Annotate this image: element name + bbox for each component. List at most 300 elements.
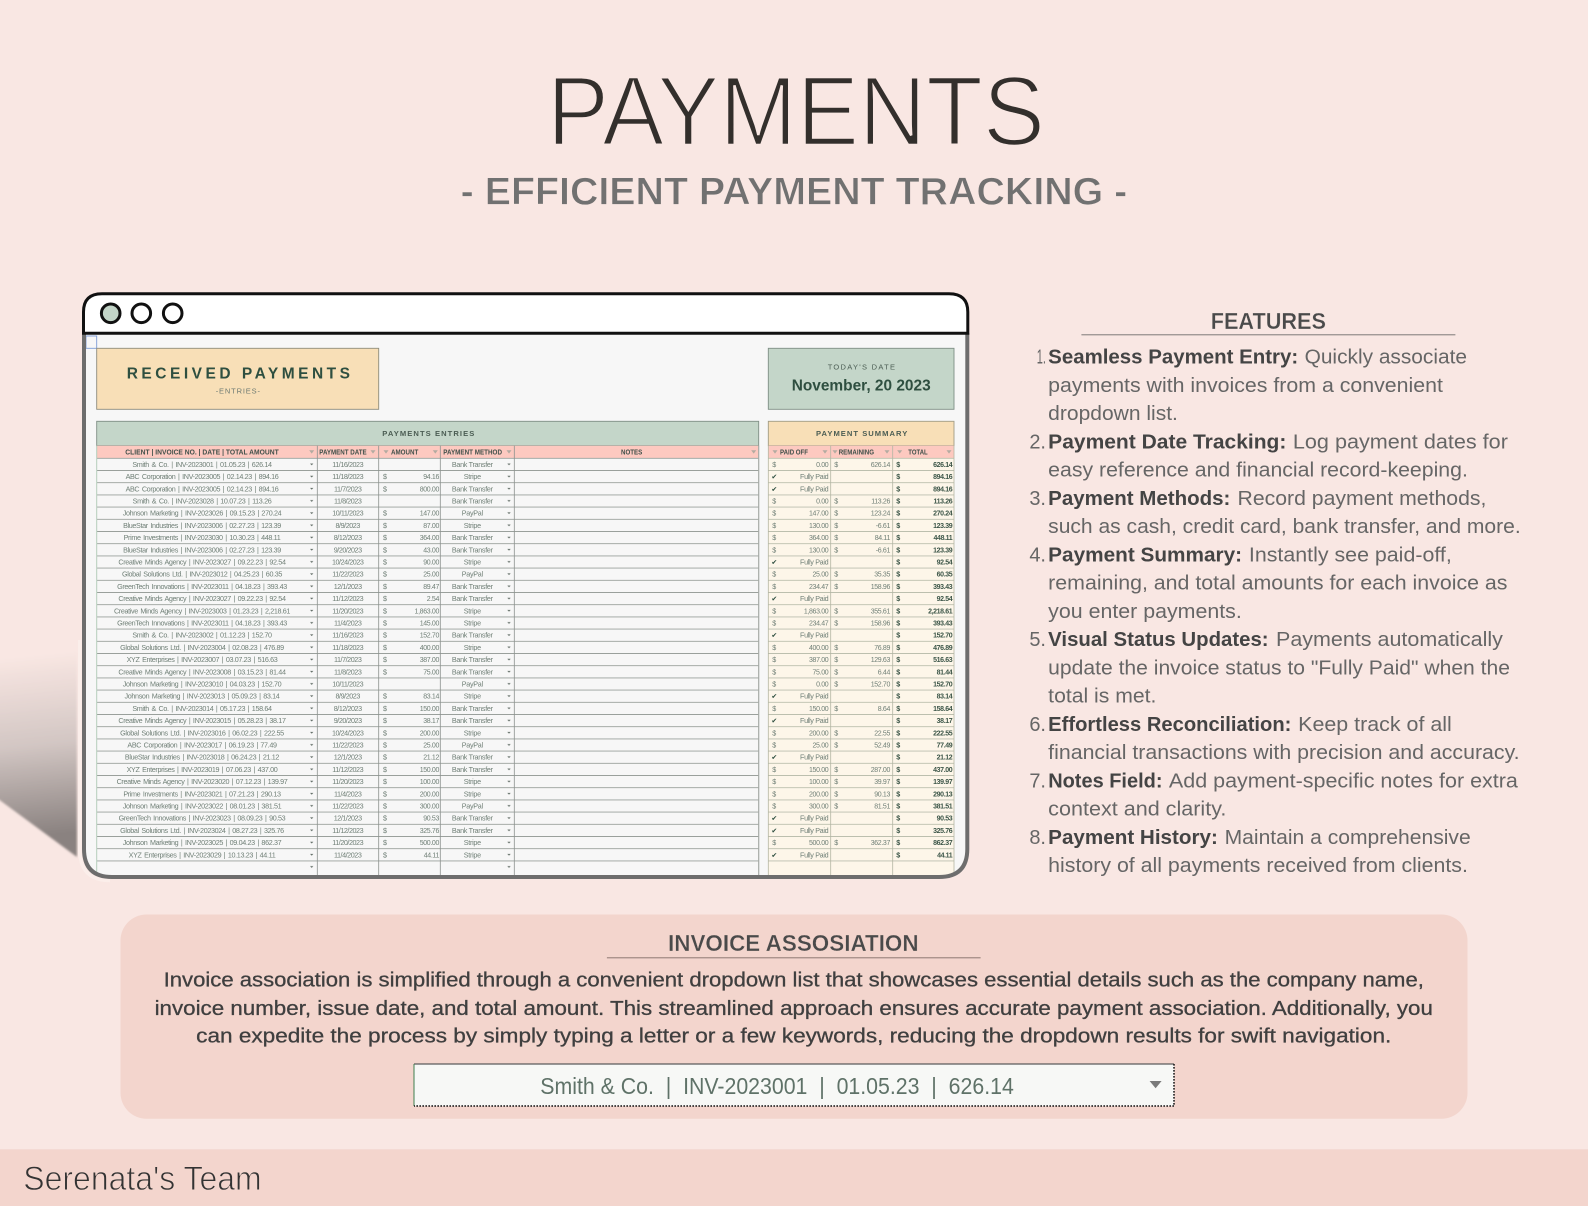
row 11: Bank Transfer [452, 582, 494, 591]
row 22: 9/20/2023 [334, 716, 362, 725]
window title bar [84, 294, 968, 333]
row 4: 11/8/2023 [334, 496, 362, 506]
row 29: $ [834, 802, 838, 810]
row 6: 87.00 [423, 523, 439, 530]
feature 5: Visual Status Updates: [1048, 629, 1269, 651]
dropdown example cell: Smith & Co. | INV-2023001 | 01.05.23 | 626.14 [540, 1073, 1014, 1099]
row 33: 44.11 [424, 852, 439, 859]
row 6: -6.61 [876, 523, 890, 530]
row 2: $ [383, 472, 387, 481]
row 31: Bank Transfer [452, 826, 494, 835]
row 5: 270.24 [933, 511, 953, 518]
row 9 [118, 559, 953, 566]
row 33: ✔ [771, 851, 777, 859]
row 13 [114, 608, 952, 615]
row 23: 10/24/2023 [332, 728, 364, 737]
window control: white dot [132, 304, 151, 323]
row 28: 200.00 [809, 791, 829, 798]
row 14: 11/4/2023 [334, 618, 362, 628]
table header row: NOTES [621, 447, 642, 456]
row 27: $ [772, 777, 776, 786]
row 30: 90.53 [937, 816, 953, 823]
feature 3: 3. [1029, 488, 1046, 510]
feature 4: 4. [1029, 544, 1046, 566]
row 17: $ [383, 655, 387, 664]
table header row: PAYMENT DATE [319, 447, 367, 456]
row 4: 113.26 [871, 498, 890, 506]
row 5: 123.24 [871, 511, 890, 518]
row 29 [123, 802, 953, 810]
row 18: 75.00 [423, 669, 439, 676]
row 13: $ [383, 606, 387, 615]
row 29: 300.00 [420, 804, 439, 810]
row 19: $ [772, 680, 776, 688]
row 2 [126, 474, 952, 480]
row 26: $ [383, 765, 387, 774]
row 21: 150.00 [809, 706, 829, 713]
feature 6 [1029, 714, 1520, 764]
row 3: Fully Paid [800, 484, 829, 493]
row 9: Creative Minds Agency | INV-2023027 | 09.22.23 | 92.54 [118, 558, 286, 566]
row 7 [124, 534, 952, 542]
row 30: Fully Paid [800, 814, 829, 823]
row 21: $ [383, 704, 387, 713]
row 20: $ [896, 692, 900, 701]
row 15: 11/16/2023 [332, 631, 364, 640]
row 23: Stripe [464, 728, 481, 737]
row 18 [118, 669, 953, 676]
row 16: 11/18/2023 [332, 643, 364, 652]
row 26: $ [834, 765, 838, 774]
row 12: $ [383, 594, 387, 603]
row 17: Bank Transfer [452, 655, 494, 664]
row 11: 158.96 [871, 584, 890, 591]
row 12: Bank Transfer [452, 594, 494, 603]
row 12: 11/12/2023 [332, 594, 364, 603]
row 17: $ [772, 655, 776, 664]
row 12: Fully Paid [800, 594, 829, 603]
row 8: 130.00 [809, 547, 829, 554]
row 26: 11/12/2023 [332, 765, 364, 774]
row 20: Fully Paid [800, 692, 829, 701]
row 25: 12/1/2023 [334, 753, 362, 762]
row 24: 52.49 [874, 742, 890, 750]
row 25: 21.12 [423, 755, 439, 762]
row 21: 158.64 [933, 706, 953, 713]
row 5: 147.00 [420, 511, 439, 518]
row 8: $ [834, 545, 838, 554]
row 32: Stripe [464, 838, 481, 847]
feature 1 [1037, 346, 1467, 425]
heading: invoice association: INVOICE ASSOSIATION [668, 930, 919, 956]
invoice description text: Invoice association is simplified through a convenient dropdown list that showcases essential details such as the company name, [164, 970, 1424, 992]
row 25: ✔ [771, 754, 777, 762]
window frame lower border [84, 333, 967, 877]
row 29: PayPal [462, 802, 483, 810]
band: payments entries [97, 421, 759, 446]
row 15: 152.70 [420, 633, 439, 640]
row 29: $ [772, 802, 776, 810]
row 29: 81.51 [874, 804, 890, 810]
row 28: $ [834, 789, 838, 798]
row 3: 894.16 [933, 486, 953, 493]
row 24: $ [383, 740, 387, 750]
row 17: 387.00 [420, 657, 439, 664]
row 1: $ [896, 460, 900, 469]
row 28 [123, 789, 953, 798]
row 10: PayPal [462, 570, 483, 579]
row 15: 152.70 [933, 633, 953, 640]
row 7: 84.11 [875, 535, 890, 542]
feature 1: Quickly associate [1305, 346, 1467, 368]
band: payment summary [768, 421, 954, 446]
feature 6: Keep track of all [1298, 714, 1452, 736]
row 16: $ [896, 643, 900, 652]
row 10: 11/22/2023 [332, 570, 364, 579]
row 33: XYZ Enterprises | INV-2023029 | 10.13.23 | 44.11 [129, 850, 276, 859]
row 13: $ [772, 606, 776, 615]
row 15 [132, 632, 952, 639]
row 31 [120, 826, 953, 835]
row 20: $ [383, 692, 387, 701]
row 7: $ [896, 533, 900, 542]
table header row: CLIENT | INVOICE NO. | DATE | TOTAL AMOUNT [125, 447, 279, 456]
footer brand name: Serenata's Team [23, 1160, 262, 1198]
row 28: $ [896, 789, 900, 798]
row 5: PayPal [462, 509, 483, 518]
row 2: 94.16 [423, 474, 439, 481]
row 31: 11/12/2023 [332, 826, 364, 835]
row 6: 123.39 [933, 523, 953, 530]
window body [84, 333, 967, 877]
row 9: Stripe [464, 558, 481, 566]
row 24: PayPal [462, 740, 483, 750]
row 14: $ [772, 618, 776, 628]
row 29: 300.00 [809, 804, 829, 810]
row 26 [126, 766, 952, 774]
feature 7: 7. [1029, 770, 1046, 792]
row 11: 89.47 [423, 584, 439, 591]
row 30: $ [383, 814, 387, 823]
row 23: Global Solutions Ltd. | INV-2023016 | 06.02.23 | 222.55 [120, 728, 284, 737]
row 15: Smith & Co. | INV-2023002 | 01.12.23 | 152.70 [132, 631, 272, 640]
row 7: Prime Investments | INV-2023030 | 10.30.23 | 448.11 [124, 533, 281, 542]
feature 2: easy reference and financial record-keeping. [1048, 460, 1468, 482]
row 15: ✔ [771, 632, 777, 640]
row 5: $ [383, 509, 387, 518]
row 11: $ [383, 582, 387, 591]
row 22: $ [383, 716, 387, 725]
card: received payments: -ENTRIES- [216, 387, 260, 396]
row 23: 222.55 [933, 730, 953, 737]
row 25: $ [383, 753, 387, 762]
dropdown example cell [414, 1064, 1174, 1106]
feature 4: Payment Summary: [1048, 544, 1242, 566]
row 10: 35.35 [874, 572, 890, 579]
row 8: -6.61 [876, 547, 890, 554]
table header row: REMAINING [839, 447, 874, 456]
row 18: Creative Minds Agency | INV-2023008 | 03.15.23 | 81.44 [118, 667, 286, 676]
band: payment summary: PAYMENT SUMMARY [816, 429, 907, 438]
row 5: Johnson Marketing | INV-2023026 | 09.15.23 | 270.24 [123, 509, 282, 518]
row 16: Stripe [464, 643, 481, 652]
feature 5: Payments automatically [1276, 629, 1503, 651]
row 6: $ [834, 521, 838, 530]
row 26: 150.00 [809, 767, 829, 774]
row 24: $ [896, 740, 900, 750]
row 1: 0.00 [816, 462, 829, 469]
row 4: 0.00 [816, 498, 829, 506]
row 10: $ [383, 570, 387, 579]
feature 3 [1029, 488, 1521, 538]
row 20 [124, 693, 953, 700]
card: today's date: TODAY'S DATE [828, 362, 895, 371]
row 7: 448.11 [934, 535, 953, 542]
row 11: $ [834, 582, 838, 591]
row 5: 147.00 [809, 511, 829, 518]
row 10: 25.00 [813, 572, 829, 579]
feature 4: remaining, and total amounts for each invoice as [1048, 572, 1508, 594]
feature 8 [1029, 827, 1471, 877]
row 27: $ [896, 777, 900, 786]
row 21: $ [772, 704, 776, 713]
row 31: Fully Paid [800, 826, 829, 835]
row 20: 83.14 [423, 694, 439, 701]
row 1: 11/16/2023 [332, 460, 364, 469]
row 6: 8/9/2023 [336, 521, 360, 530]
row 23 [120, 730, 952, 737]
row 6: $ [383, 521, 387, 530]
page-curl shadow behind window [0, 620, 77, 857]
row 28: $ [383, 789, 387, 798]
row 22: ✔ [771, 717, 777, 725]
row 14: 393.43 [933, 620, 953, 628]
row 15: Bank Transfer [452, 631, 494, 640]
row 14: $ [383, 618, 387, 628]
row 15: Fully Paid [800, 631, 829, 640]
row 2: Stripe [464, 472, 481, 481]
invoice description text [155, 970, 1433, 1048]
row 2: ✔ [771, 473, 777, 481]
row 23: $ [772, 728, 776, 737]
row 17 [126, 656, 952, 664]
row 32: Johnson Marketing | INV-2023025 | 09.04.23 | 862.37 [123, 838, 282, 847]
row 18: 6.44 [878, 669, 890, 676]
row 16 [120, 644, 952, 652]
row 28: $ [772, 789, 776, 798]
row 2: Fully Paid [800, 472, 829, 481]
feature 7: Add payment-specific notes for extra [1169, 770, 1519, 792]
row 8: 43.00 [423, 547, 439, 554]
row 27: 100.00 [809, 779, 829, 786]
row 20: ✔ [771, 693, 777, 701]
row 11: GreenTech Innovations | INV-2023011 | 04.18.23 | 393.43 [117, 582, 287, 591]
row 15: $ [896, 631, 900, 640]
row 17: XYZ Enterprises | INV-2023007 | 03.07.23 | 516.63 [127, 655, 278, 664]
row 26: 150.00 [420, 767, 439, 774]
row 30: ✔ [771, 815, 777, 823]
row 10: 25.00 [423, 572, 439, 579]
row 24: ABC Corporation | INV-2023017 | 06.19.23 | 77.49 [127, 740, 277, 750]
row 5 [122, 510, 953, 517]
row 19: 10/11/2023 [332, 680, 364, 688]
row 18: $ [383, 667, 387, 676]
row 8: 123.39 [933, 547, 953, 554]
row 9: $ [383, 558, 387, 566]
row 2: 894.16 [933, 474, 953, 481]
row 13: $ [834, 606, 838, 615]
row 4: $ [896, 496, 900, 506]
feature 8: Maintain a comprehensive [1225, 827, 1471, 849]
row 12: ✔ [771, 595, 777, 603]
row 32: 11/20/2023 [332, 838, 364, 847]
row 24: $ [834, 740, 838, 750]
row 32: 500.00 [809, 840, 829, 847]
row 6 [124, 522, 952, 530]
row 16: 400.00 [420, 645, 439, 652]
row 10: 60.35 [937, 572, 953, 579]
feature 4 [1029, 544, 1508, 623]
feature 5 [1029, 629, 1510, 708]
feature 4: you enter payments. [1048, 601, 1242, 623]
row 12: Creative Minds Agency | INV-2023027 | 09.22.23 | 92.54 [118, 594, 286, 603]
row 2: ABC Corporation | INV-2023005 | 02.14.23 | 894.16 [126, 472, 279, 481]
row 19: $ [896, 680, 900, 688]
row 26: 287.00 [871, 767, 890, 774]
row 7: Bank Transfer [452, 533, 494, 542]
row 17: $ [834, 655, 838, 664]
row 32 [123, 838, 953, 847]
row 16: 476.89 [933, 645, 953, 652]
row 12: 92.54 [937, 596, 953, 603]
row 9: ✔ [771, 558, 777, 566]
row 13: 355.61 [871, 608, 890, 615]
row 28: 200.00 [420, 791, 439, 798]
row 26: XYZ Enterprises | INV-2023019 | 07.06.23 | 437.00 [127, 765, 278, 774]
row 22: Fully Paid [800, 716, 829, 725]
row 27: Creative Minds Agency | INV-2023020 | 07.12.23 | 139.97 [117, 777, 288, 786]
row 24: 11/22/2023 [332, 740, 364, 750]
row 20: Johnson Marketing | INV-2023013 | 05.09.23 | 83.14 [125, 692, 280, 701]
feature 1: dropdown list. [1048, 403, 1178, 425]
row 32: $ [896, 838, 900, 847]
row 30: GreenTech Innovations | INV-2023023 | 08.09.23 | 90.53 [119, 814, 286, 823]
row 9: Fully Paid [800, 558, 829, 566]
row 11: $ [896, 582, 900, 591]
row 21: $ [896, 704, 900, 713]
row 16: 76.89 [874, 645, 890, 652]
row 3: $ [383, 484, 387, 493]
feature 6: financial transactions with precision and accuracy. [1048, 742, 1520, 764]
row 7: 364.00 [809, 535, 829, 542]
row 28: Prime Investments | INV-2023021 | 07.21.23 | 290.13 [123, 789, 281, 798]
row 6: $ [896, 521, 900, 530]
row 19 [122, 681, 952, 688]
row 29: $ [383, 802, 387, 810]
row 19: PayPal [462, 680, 483, 688]
band: payments entries: PAYMENTS ENTRIES [382, 429, 474, 438]
row 17: 387.00 [809, 657, 829, 664]
row 33 [129, 850, 953, 859]
row 9: $ [896, 558, 900, 566]
row 13: 2,218.61 [928, 608, 953, 615]
dropdown arrows column [310, 463, 314, 868]
row 33: 44.11 [937, 852, 953, 859]
row 11: 234.47 [809, 584, 829, 591]
row 17: 129.63 [871, 657, 890, 664]
row 16: 400.00 [809, 645, 829, 652]
summary column background [768, 458, 954, 878]
table data rows [114, 460, 953, 859]
row 7: 364.00 [420, 535, 439, 542]
spreadsheet content [86, 336, 954, 878]
row 3: 800.00 [420, 486, 439, 493]
row 11: 12/1/2023 [334, 582, 362, 591]
row 27: $ [834, 777, 838, 786]
row 6: Stripe [464, 521, 481, 530]
window control: green dot [101, 304, 120, 323]
row 24: $ [772, 740, 776, 750]
row 28: 11/4/2023 [334, 789, 362, 798]
feature 2 [1029, 431, 1508, 482]
row 25: Bank Transfer [452, 753, 494, 762]
table header row: PAID OFF [780, 447, 808, 456]
row 25: Fully Paid [800, 753, 829, 762]
table header row: PAYMENT METHOD [443, 447, 502, 456]
feature 6: Effortless Reconciliation: [1048, 714, 1291, 736]
row 33: $ [383, 850, 387, 859]
feature 6: 6. [1029, 714, 1046, 736]
row 22: $ [896, 716, 900, 725]
row 8: Bank Transfer [452, 545, 494, 554]
row 4 [133, 498, 952, 505]
row 11 [118, 584, 952, 590]
row 3: ✔ [771, 485, 777, 493]
row 27 [117, 778, 952, 786]
row 16: $ [772, 643, 776, 652]
feature 7: Notes Field: [1048, 770, 1162, 792]
row 11: 393.43 [933, 584, 953, 591]
method dropdown arrows column [507, 463, 511, 868]
row 27: 11/20/2023 [332, 777, 364, 786]
row 25: $ [896, 753, 900, 762]
row 28: Stripe [464, 789, 481, 798]
row 4: $ [772, 496, 776, 506]
row 24 [128, 742, 952, 749]
row 26: 437.00 [933, 767, 953, 774]
row 17: 516.63 [933, 657, 953, 664]
feature 2: Payment Date Tracking: [1048, 431, 1286, 453]
row 21: $ [834, 704, 838, 713]
feature 2: Log payment dates for [1293, 431, 1508, 453]
row 4: $ [834, 496, 838, 506]
row 30: Bank Transfer [452, 814, 494, 823]
row 13: Stripe [464, 606, 481, 615]
feature 5: 5. [1029, 629, 1046, 651]
row 3: ABC Corporation | INV-2023005 | 02.14.23 | 894.16 [126, 484, 279, 493]
row 20: Stripe [464, 692, 481, 701]
row 20: 8/9/2023 [336, 692, 360, 701]
row 10: $ [772, 570, 776, 579]
panel: spreadsheet browser window [84, 294, 968, 878]
row 32: $ [772, 838, 776, 847]
row 7: 8/12/2023 [334, 533, 362, 542]
row 28: 290.13 [933, 791, 953, 798]
card: today's date: November, 20 2023 [792, 378, 931, 395]
row 23: $ [383, 728, 387, 737]
feature 2: 2. [1029, 431, 1046, 453]
row 1: $ [772, 460, 776, 469]
